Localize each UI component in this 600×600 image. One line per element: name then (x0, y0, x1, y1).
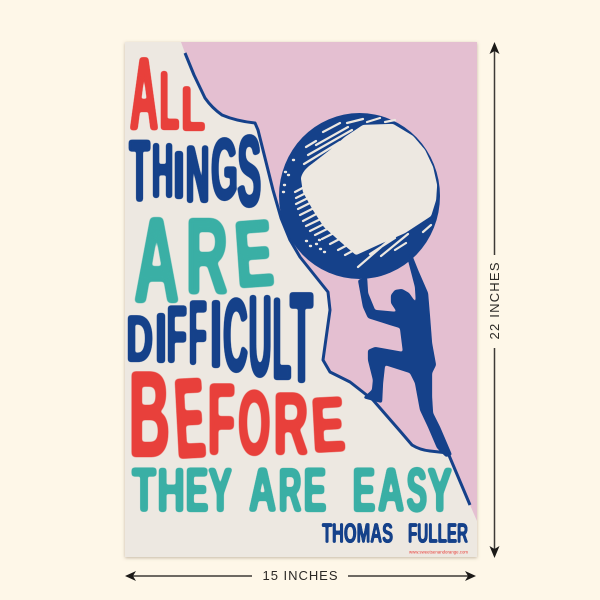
word: DIFFICULT: C (223, 278, 248, 394)
word: ALL: A (130, 38, 158, 151)
word: BEFORE: E (172, 355, 208, 483)
line: THEY ARE EASY: E (353, 457, 375, 525)
word: DIFFICULT: D (126, 303, 153, 376)
word: DIFFICULT: I (210, 281, 222, 388)
word: THINGS (129, 115, 261, 229)
word: BEFORE: B (129, 347, 170, 483)
line: THEY ARE EASY: H (157, 456, 185, 524)
pink sky panel (181, 42, 477, 521)
poster (125, 38, 477, 557)
word: THINGS: G (211, 120, 238, 217)
word: DIFFICULT (126, 266, 313, 411)
width dimension arrow (125, 568, 476, 583)
height dimension arrow (487, 42, 502, 558)
word: ARE: E (231, 199, 277, 308)
word: BEFORE: R (274, 376, 308, 474)
word: BEFORE (129, 347, 347, 483)
line: THEY ARE EASY: Y (428, 456, 452, 524)
boulder (279, 113, 440, 279)
word: ALL: L (160, 55, 179, 148)
word: THINGS: T (129, 122, 150, 219)
word: ARE: R (186, 197, 228, 317)
line: THEY ARE EASY: A (249, 456, 276, 524)
word: THINGS: I (173, 137, 185, 212)
word: DIFFICULT: F (167, 290, 187, 380)
word: THINGS: N (186, 130, 209, 220)
website url: www.sweetsenandorange.com (409, 550, 468, 554)
word: ARE (134, 191, 277, 328)
word: THINGS: S (238, 115, 261, 229)
attribution: Thomas Fuller: FULLER (408, 518, 468, 548)
attribution: Thomas Fuller: THOMAS (322, 518, 393, 548)
line: THEY ARE EASY: Y (209, 456, 232, 525)
word: ALL: L (181, 75, 205, 144)
height dimension arrow: 22 INCHES (487, 262, 502, 340)
line: THEY ARE EASY (132, 456, 452, 525)
word: DIFFICULT: I (155, 301, 167, 378)
line: THEY ARE EASY: T (132, 456, 156, 524)
word: DIFFICULT: L (273, 273, 291, 405)
line: THEY ARE EASY: R (279, 457, 301, 525)
word: DIFFICULT: T (290, 266, 313, 411)
word: DIFFICULT: F (189, 283, 207, 384)
line: THEY ARE EASY: E (304, 457, 326, 525)
climber figure (358, 250, 452, 457)
word: ALL (130, 38, 205, 151)
width dimension arrow: 15 INCHES (262, 568, 338, 583)
word: BEFORE: O (238, 371, 270, 473)
line: THEY ARE EASY: A (378, 456, 404, 524)
cliff outline (185, 53, 470, 505)
word: THINGS: H (152, 128, 173, 214)
word: BEFORE: F (208, 362, 235, 476)
word: BEFORE: E (309, 380, 347, 468)
word: DIFFICULT: U (249, 271, 271, 401)
line: THEY ARE EASY: S (407, 458, 427, 525)
line: THEY ARE EASY: E (186, 457, 208, 525)
boulder hatching (283, 118, 431, 267)
word: ARE: A (134, 191, 179, 328)
